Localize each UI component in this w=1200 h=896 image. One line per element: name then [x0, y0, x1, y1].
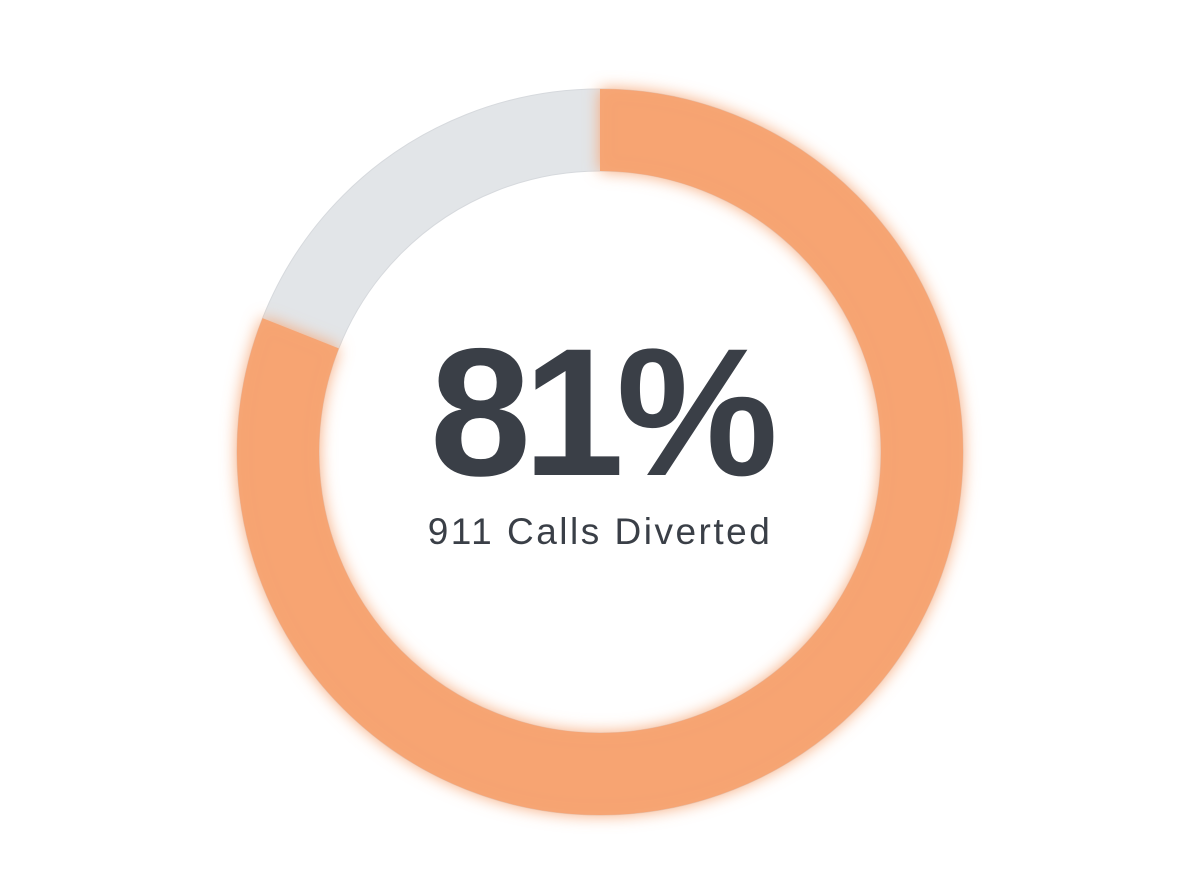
label: 911 Calls Diverted: [428, 511, 772, 552]
gray remainder arc: [278, 130, 922, 774]
big percentage: 81%: [430, 310, 774, 514]
orange 81% arc: [278, 130, 922, 774]
